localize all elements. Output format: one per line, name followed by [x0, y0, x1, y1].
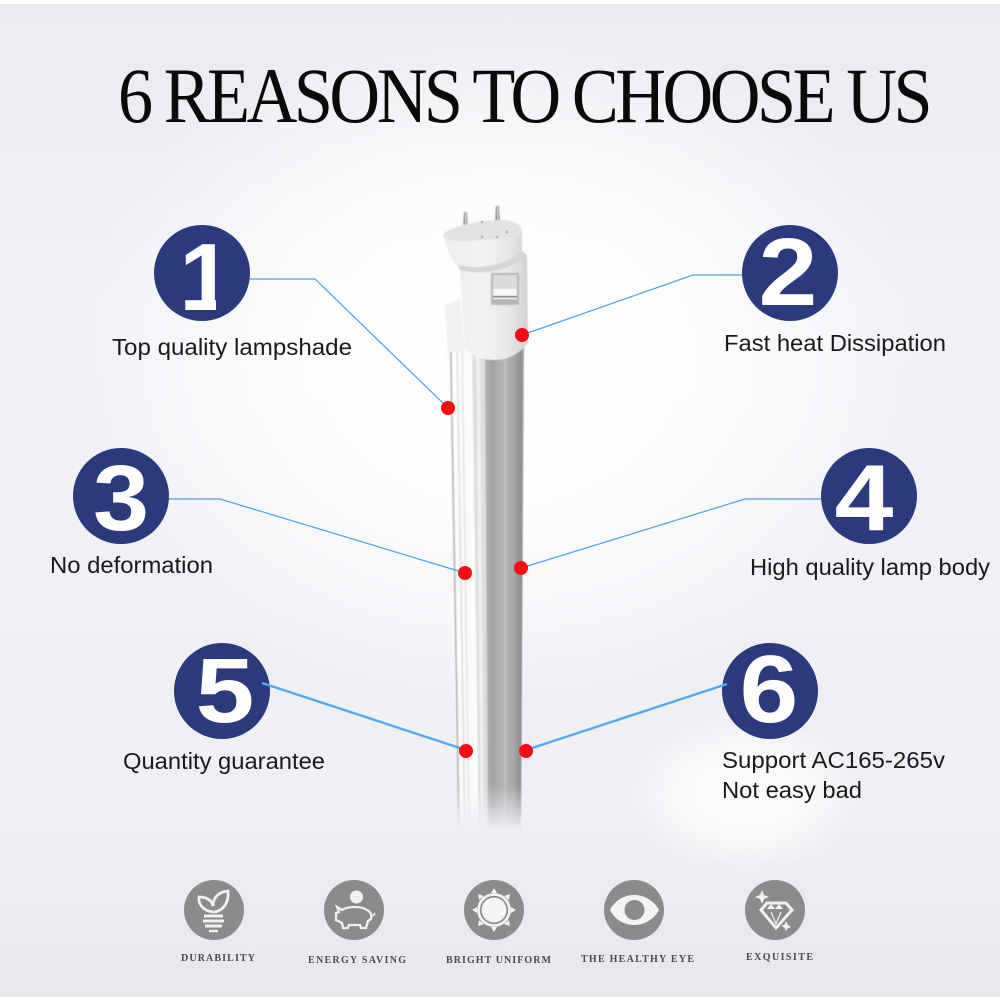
connector pins — [463, 206, 500, 234]
callout 1 — [112, 224, 455, 415]
digit 5: 5 — [196, 639, 254, 742]
feature: energy saving — [308, 880, 406, 966]
callout 3 — [50, 446, 472, 580]
caption: exquisite: EXQUISITE — [746, 952, 813, 963]
label 6 — [722, 747, 946, 803]
callout 5 — [123, 639, 473, 774]
leader line 6 — [526, 684, 727, 750]
title: 6 REASONS TO CHOOSE US — [118, 54, 933, 140]
leader line 5 — [262, 683, 466, 750]
marker 4 — [514, 561, 528, 575]
marker 2 — [515, 328, 529, 342]
marker 1 — [441, 401, 455, 415]
label 5: Quantity guarantee — [123, 748, 325, 774]
digit 3: 3 — [93, 446, 149, 550]
number badge 5 — [174, 643, 270, 739]
number badge 1 — [154, 225, 250, 321]
feature: exquisite — [745, 880, 813, 963]
tube body — [449, 347, 524, 826]
label 3: No deformation — [50, 552, 213, 578]
label 4: High quality lamp body — [750, 554, 991, 580]
label 6: Not easy bad — [722, 777, 862, 803]
feature: bright uniform — [446, 880, 552, 966]
snap window — [491, 273, 519, 305]
marker 6 — [519, 744, 533, 758]
label 1: Top quality lampshade — [112, 334, 352, 360]
icon: eye — [604, 880, 664, 940]
caption: the healthy eye: THE HEALTHY EYE — [581, 954, 694, 965]
number badge 4 — [821, 448, 917, 544]
callout 4 — [514, 445, 991, 580]
callout 2 — [515, 219, 946, 356]
number badge 2 — [742, 225, 838, 321]
caption: bright uniform: BRIGHT UNIFORM — [446, 955, 552, 966]
digit 2: 2 — [759, 219, 817, 326]
LED tube lamp — [443, 206, 528, 832]
digit 4: 4 — [835, 445, 894, 551]
digit 6: 6 — [740, 636, 798, 743]
number badge 3 — [73, 448, 169, 544]
label 6: Support AC165-265v — [722, 747, 946, 773]
caption: durability: DURABILITY — [181, 953, 256, 964]
lamp end cap — [443, 206, 528, 360]
digit 1: 1 — [179, 224, 233, 331]
icon: diamond — [745, 880, 805, 940]
icon: sun — [464, 880, 524, 940]
feature: the healthy eye — [581, 880, 694, 965]
icon: plant bulb — [184, 880, 244, 940]
marker 3 — [458, 566, 472, 580]
marker 5 — [459, 744, 473, 758]
feature: durability — [181, 880, 256, 964]
number badge 6 — [722, 643, 818, 739]
callout 6 — [519, 636, 946, 803]
caption: energy saving: ENERGY SAVING — [308, 955, 406, 966]
label 2: Fast heat Dissipation — [724, 330, 946, 356]
icon: piggy bank — [324, 880, 384, 940]
